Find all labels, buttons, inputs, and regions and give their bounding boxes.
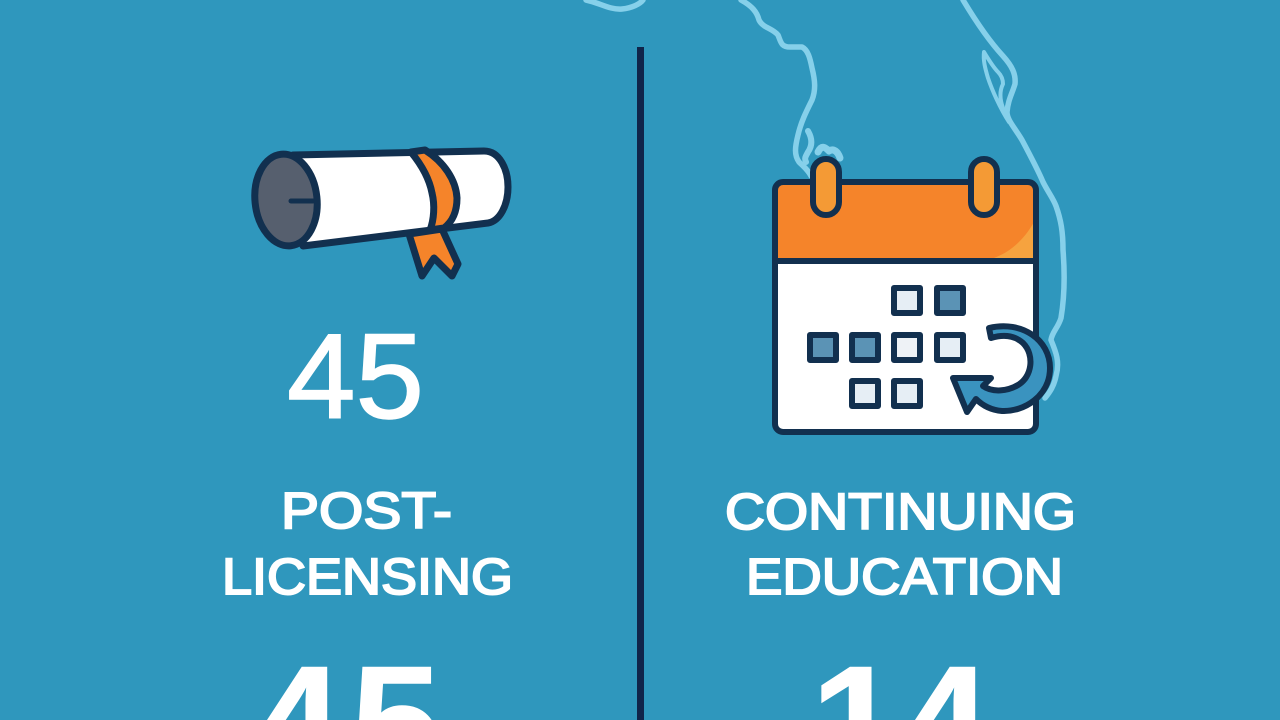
heading: post-licensing: POST-	[281, 482, 452, 539]
circular arrow	[953, 326, 1050, 412]
calendar header	[778, 185, 1034, 261]
Florida map outline	[586, 0, 1064, 398]
icon: diploma scroll	[250, 150, 508, 276]
vertical divider	[637, 47, 644, 720]
heading: continuing education: EDUCATION	[746, 548, 1063, 605]
heading: post-licensing	[222, 482, 513, 605]
calendar rings	[813, 159, 997, 215]
heading: continuing education	[725, 483, 1076, 605]
stat: post-licensing small number: 45	[287, 308, 424, 444]
heading: continuing education: CONTINUING	[725, 483, 1076, 540]
ribbon tail	[409, 229, 458, 276]
calendar page	[775, 182, 1036, 432]
icon: calendar	[775, 159, 1050, 432]
calendar day squares	[810, 288, 963, 406]
scroll body	[293, 151, 508, 246]
ribbon band	[411, 150, 457, 230]
heading: post-licensing: LICENSING	[222, 548, 513, 605]
scroll end cap	[250, 151, 322, 249]
